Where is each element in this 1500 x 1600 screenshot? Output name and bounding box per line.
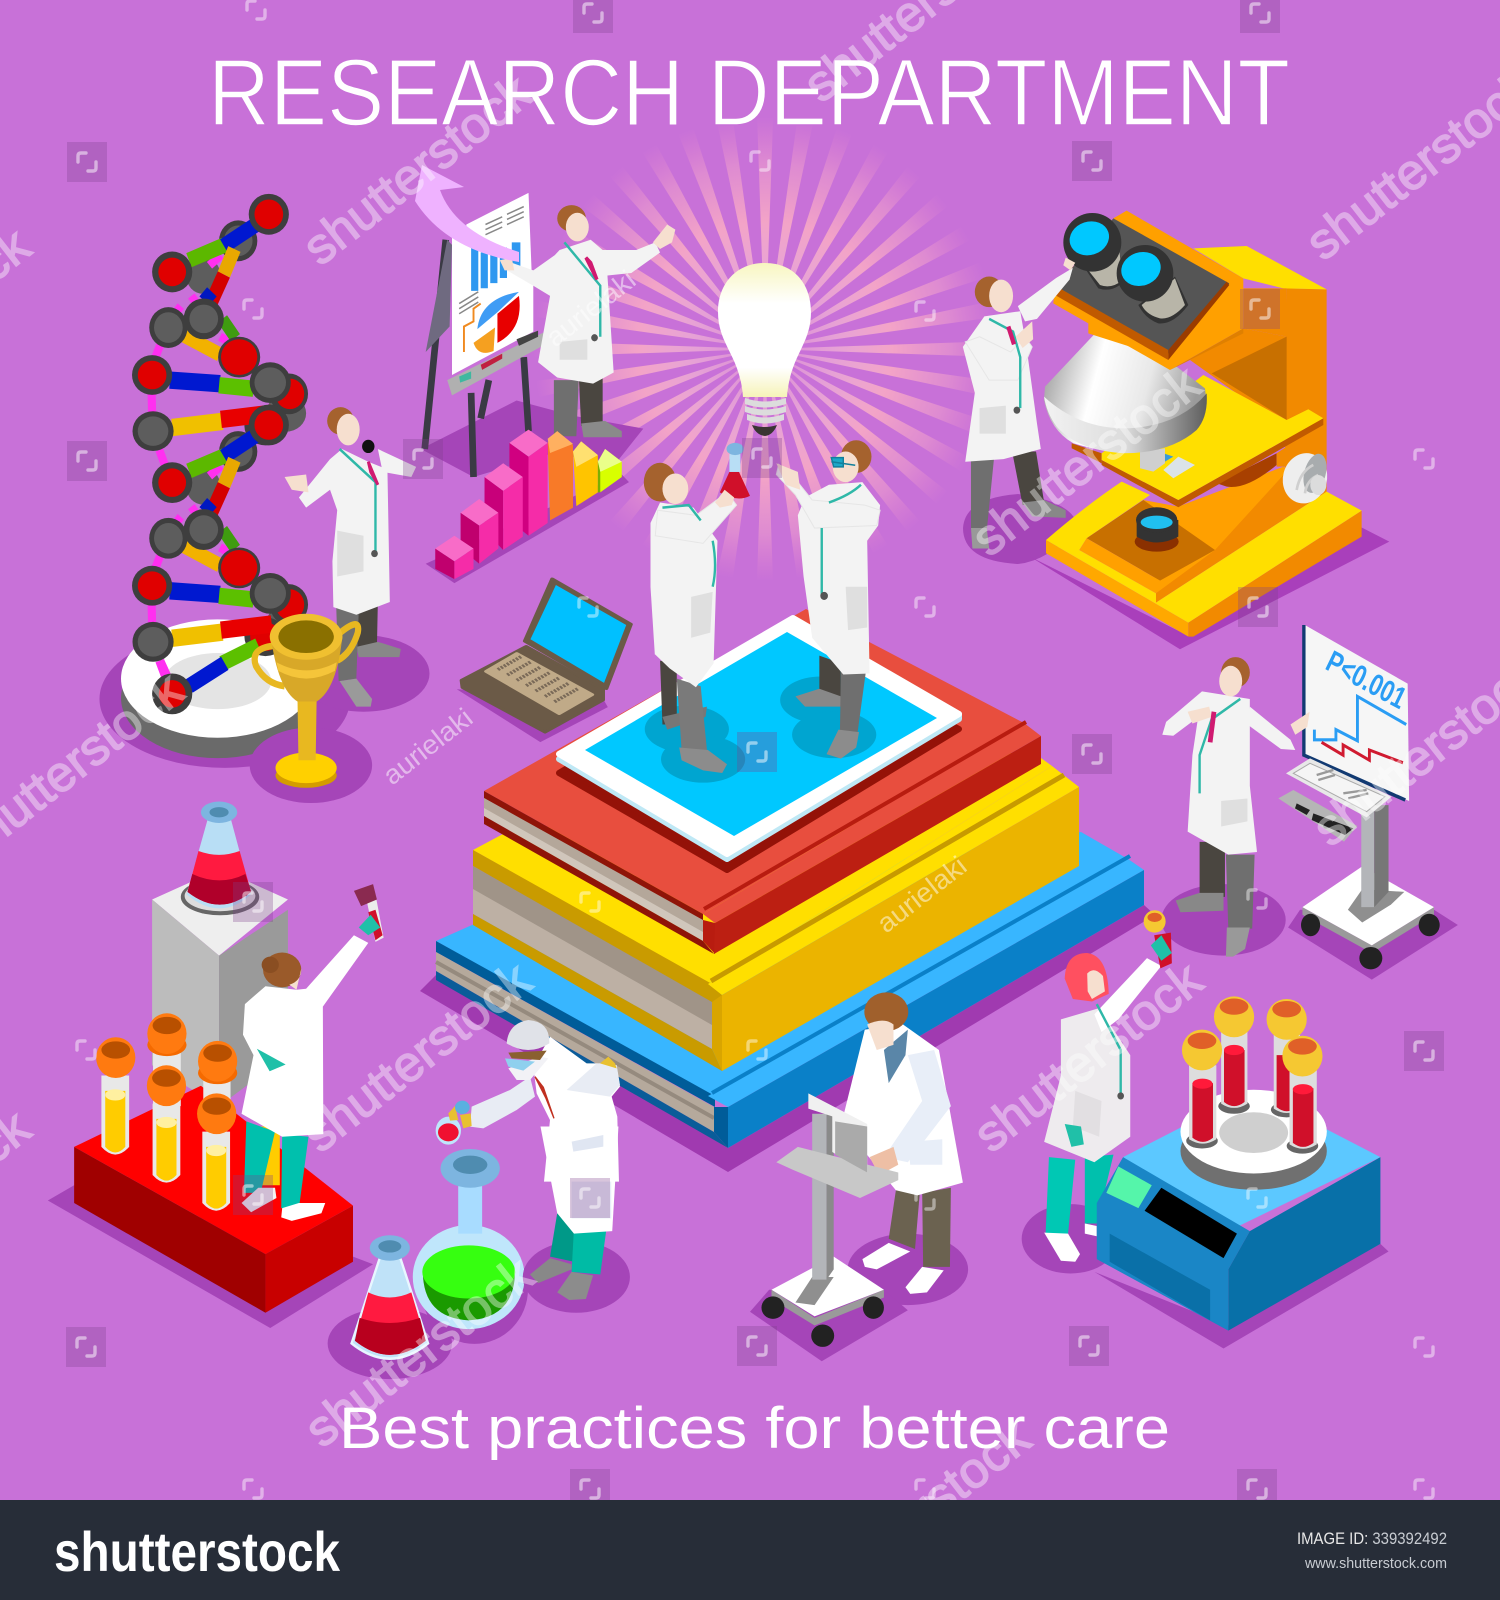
watermark layer: aurielaki [871, 850, 972, 939]
footer bar [0, 1500, 1500, 1600]
objective cone [1044, 330, 1207, 453]
chart board with P value: P<0.001 [1321, 644, 1411, 716]
person: doctor at microscope [963, 258, 1075, 548]
easel with charts [421, 193, 643, 477]
person: doctor with red hair [1022, 910, 1172, 1273]
chart board with P value [1304, 625, 1411, 801]
carousel with blood tubes [1180, 996, 1327, 1190]
watermark layer: shutterstock [294, 1245, 544, 1458]
microscope [1030, 211, 1389, 649]
doctor shadow at microscope [963, 494, 1078, 564]
title: RESEARCH DEPARTMENT [208, 40, 1290, 146]
arrow [415, 165, 519, 262]
red book [484, 609, 1041, 954]
flask on pedestal [152, 802, 288, 1106]
monitor cart right [1278, 758, 1458, 980]
bar chart [426, 430, 629, 583]
person: doctor holding flask [644, 443, 750, 783]
watermark layer: shutterstock [292, 950, 542, 1163]
trophy [250, 614, 372, 803]
watermark layer: shutterstock [963, 950, 1213, 1163]
person: scientist with protective suit [436, 1020, 630, 1313]
light rays [649, 233, 881, 465]
blue book [436, 832, 1144, 1148]
icon: light bulb [718, 263, 811, 436]
image id: IMAGE ID: 339392492 [1297, 1530, 1447, 1548]
tablet [559, 618, 959, 870]
panel: book stack platform [420, 609, 1155, 1172]
person: woman lifting test tube [242, 884, 384, 1221]
microscope base [1046, 467, 1362, 637]
person: doctor with glasses pointing [776, 440, 880, 759]
panel: DNA model [99, 194, 350, 768]
person: doctor presenting p-value [1161, 657, 1310, 957]
person: doctor at easel [500, 205, 675, 437]
test tube rack [48, 1013, 373, 1328]
blood sample machine [1094, 996, 1389, 1348]
red flask [328, 1235, 452, 1379]
stage [1072, 375, 1323, 507]
watermark layer: shutterstock [292, 63, 542, 276]
column [1190, 246, 1327, 492]
focus knob [1277, 448, 1333, 508]
objective lens [1135, 507, 1179, 552]
laptop [457, 579, 631, 742]
footer logo: shutterstock [54, 1520, 341, 1583]
eyepiece head [1053, 211, 1243, 370]
subtitle: Best practices for better care [339, 1396, 1170, 1461]
watermark layer: shutterstock [961, 354, 1211, 567]
watermark layer: aurielaki [540, 264, 641, 353]
green round flask [413, 1149, 528, 1344]
yellow book [473, 750, 1079, 1071]
watermark layer: aurielaki [377, 702, 478, 791]
person: doctor with microphone [285, 407, 430, 712]
monitor cart center [750, 1093, 908, 1361]
person: doctor at terminal [843, 992, 968, 1305]
website: www.shutterstock.com [1304, 1555, 1447, 1572]
